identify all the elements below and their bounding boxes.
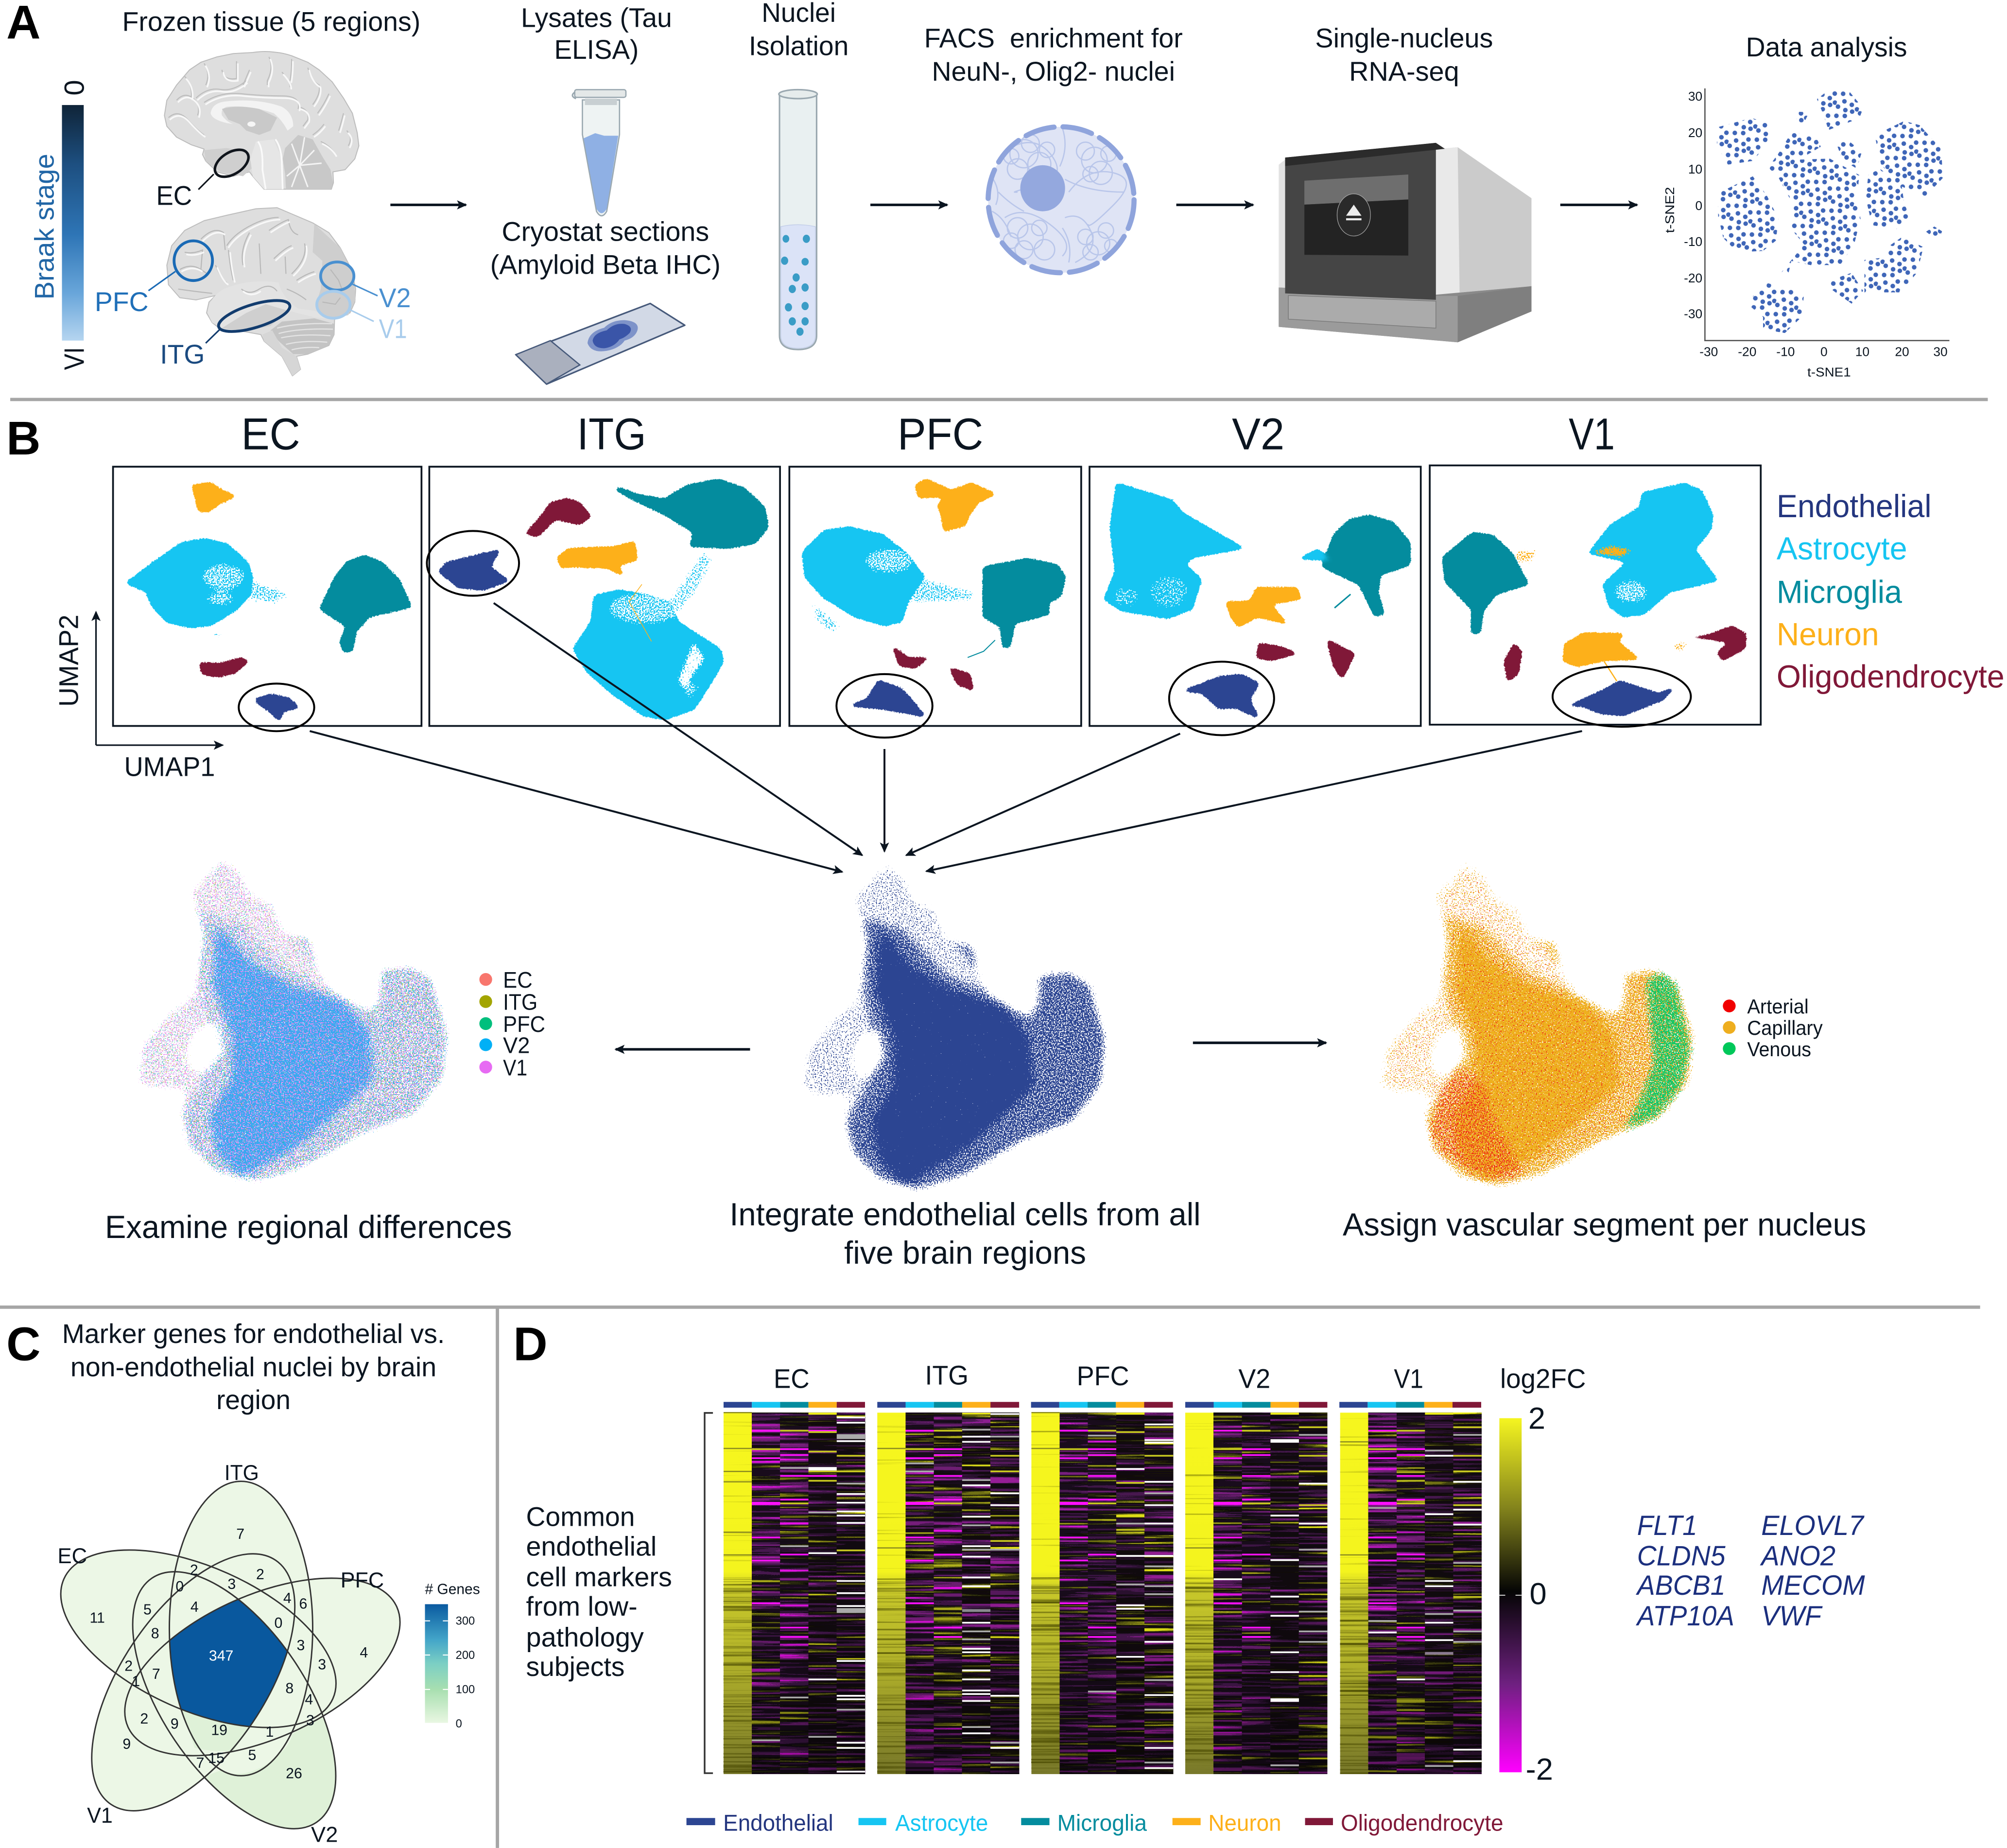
heatmap heading labels: EC	[774, 1363, 810, 1394]
Venn diagram: 5	[143, 1602, 152, 1618]
UMAP coloured by region	[134, 855, 451, 1186]
region labels: PFC	[95, 287, 149, 317]
vascular legend	[1723, 995, 1823, 1061]
chart: t-SNE scatter: 10	[1855, 344, 1869, 359]
Venn diagram: 347	[209, 1648, 233, 1664]
heading: FACS enrichment: NeuN-, Olig2- nuclei	[932, 56, 1175, 87]
caption: vascular segment: Assign vascular segment per nucleus	[1343, 1206, 1866, 1242]
side text: common markers: subjects	[526, 1652, 624, 1682]
heatmap EC	[724, 1402, 865, 1774]
chart: t-SNE scatter: 30	[1933, 344, 1948, 359]
heatmap heading labels: V1	[1394, 1363, 1423, 1394]
Venn diagram: 15	[208, 1750, 225, 1766]
arrow: EC to integrated	[310, 731, 842, 872]
heading: FACS enrichment	[924, 23, 1183, 87]
arrow: ITG to integrated	[494, 603, 862, 855]
Venn diagram: V2	[311, 1822, 338, 1847]
chart: t-SNE scatter: 10	[1688, 162, 1702, 176]
gene list	[1636, 1510, 1865, 1632]
integrated endothelial UMAP	[799, 862, 1108, 1192]
heading: cryostat sections: (Amyloid Beta IHC)	[490, 250, 721, 280]
Venn diagram: 5	[248, 1747, 256, 1763]
chart: t-SNE scatter: -30	[1684, 307, 1702, 321]
gene list: ATP10A	[1636, 1601, 1734, 1632]
panel A: workflow	[6, 0, 1949, 384]
arrow: FACS to sequencing	[1177, 205, 1253, 206]
panel letter C: C	[6, 1318, 41, 1371]
caption: integrate cells: Integrate endothelial cells from all	[729, 1196, 1201, 1232]
label EC: EC	[156, 181, 192, 211]
chart: t-SNE scatter	[1662, 88, 1949, 379]
icon: sequencer	[1279, 143, 1531, 342]
chart: t-SNE scatter: -20	[1684, 271, 1702, 285]
Venn diagram: 4	[190, 1599, 199, 1615]
Braak stage colour bar: 0	[59, 80, 90, 96]
UMAP coloured by vascular segment	[1378, 859, 1696, 1189]
Venn diagram: 4	[283, 1590, 292, 1606]
Venn diagram: 2	[140, 1711, 148, 1727]
small microglia streak PFC	[968, 640, 995, 658]
heading: frozen tissue: Frozen tissue (5 regions)	[122, 6, 420, 36]
Venn diagram	[59, 1465, 401, 1842]
cell-type legend: Neuron	[1777, 616, 1879, 652]
Venn diagram: 4	[305, 1692, 313, 1708]
heading PFC: PFC	[898, 409, 983, 459]
region legend	[479, 967, 545, 1081]
heading: FACS enrichment: FACS enrichment for	[924, 23, 1183, 53]
Braak stage colour bar: VI	[59, 347, 90, 370]
Venn diagram: 2	[124, 1658, 133, 1674]
chart: t-SNE scatter: -20	[1738, 344, 1756, 359]
Venn diagram: 7	[236, 1526, 244, 1542]
bottom cell-type legend: Neuron	[1208, 1811, 1281, 1836]
arrow: sequencing to analysis	[1560, 205, 1637, 206]
gene list: ANO2	[1760, 1540, 1835, 1571]
gene count colour bar: 200	[456, 1649, 475, 1662]
arrow: isolation to FACS	[870, 205, 947, 206]
chart: t-SNE scatter: 30	[1688, 89, 1702, 104]
heading: single-nucleus RNA-seq	[1315, 23, 1493, 87]
arrow: tissue to lysates	[390, 205, 466, 206]
Venn diagram: PFC	[341, 1568, 384, 1592]
bracket	[705, 1413, 713, 1773]
heatmap heading labels	[774, 1360, 1586, 1394]
heatmap PFC	[1031, 1402, 1173, 1774]
Venn diagram: 3	[318, 1657, 326, 1673]
arrow: PFC to integrated	[884, 749, 885, 852]
heading: nuclei isolation	[749, 0, 848, 61]
side text: common markers: Common	[526, 1502, 635, 1532]
arrow: to regional differences	[616, 1049, 750, 1050]
Venn diagram: 9	[171, 1716, 179, 1732]
region labels: V1	[379, 314, 407, 344]
bottom cell-type legend: Microglia	[1057, 1811, 1147, 1836]
chart: t-SNE scatter: t-SNE2	[1662, 187, 1677, 233]
Venn diagram: 3	[306, 1713, 314, 1729]
UMAP panel ITG	[429, 467, 780, 726]
gene count colour bar: 100	[456, 1684, 475, 1696]
circle: endothelial V1	[1553, 666, 1691, 727]
Venn diagram: V1	[87, 1803, 113, 1828]
chart: t-SNE scatter: t-SNE1	[1807, 365, 1851, 379]
heatmap heading labels: ITG	[925, 1360, 969, 1390]
log2FC colour bar: 0	[1530, 1577, 1547, 1611]
arrow: V2 to integrated	[906, 733, 1180, 855]
caption: integrate cells: five brain regions	[844, 1235, 1086, 1271]
chart: t-SNE scatter: 20	[1688, 125, 1702, 140]
panel letter B: B	[6, 412, 41, 465]
region legend: ITG	[503, 990, 537, 1015]
chart: t-SNE scatter: 0	[1695, 198, 1702, 213]
Braak stage colour bar	[30, 80, 90, 370]
region legend: EC	[503, 967, 533, 993]
Venn diagram: 19	[211, 1722, 227, 1738]
icon: lateral brain with regions	[149, 208, 378, 376]
cell-type legend: Endothelial	[1777, 488, 1932, 524]
cell-type legend: Astrocyte	[1777, 530, 1907, 566]
heatmap heading labels: V2	[1238, 1363, 1270, 1394]
heading: data analysis: Data analysis	[1746, 32, 1907, 62]
region labels	[95, 283, 411, 369]
gene list: FLT1	[1637, 1510, 1697, 1541]
chart: t-SNE scatter: -10	[1684, 234, 1702, 249]
panel letter D: D	[513, 1318, 548, 1371]
arrow: V1 to integrated	[926, 731, 1582, 871]
icon: nuclei test tube	[779, 89, 817, 349]
gene count colour bar: 0	[456, 1718, 462, 1730]
gene list: MECOM	[1761, 1570, 1865, 1601]
heading V1: V1	[1569, 409, 1615, 459]
gene list: VWF	[1761, 1601, 1823, 1632]
gene list: ELOVL7	[1761, 1510, 1865, 1541]
heatmap heading labels: log2FC	[1500, 1363, 1586, 1394]
icon: microscope slide	[516, 303, 685, 384]
caption: regional differences: Examine regional differences	[105, 1209, 512, 1245]
heatmap heading labels: PFC	[1077, 1361, 1129, 1391]
UMAP axes	[54, 612, 223, 782]
heatmap ITG	[877, 1402, 1019, 1774]
side text: common markers: endothelial	[526, 1531, 657, 1561]
Venn diagram: 11	[89, 1610, 105, 1626]
icon: nucleus	[988, 127, 1134, 273]
caption: integrate cells	[729, 1196, 1201, 1271]
bottom cell-type legend: Endothelial	[723, 1811, 833, 1836]
icon: sagittal brain	[164, 52, 359, 190]
region labels: V2	[379, 283, 411, 313]
region labels: ITG	[160, 339, 205, 369]
circle: endothelial V2	[1169, 662, 1274, 735]
Venn diagram: 0	[175, 1579, 184, 1595]
small microglia streak V2	[1334, 594, 1350, 608]
arrow: to vascular segment	[1193, 1042, 1326, 1043]
Venn diagram: 0	[274, 1615, 282, 1631]
Venn diagram: 3	[227, 1576, 236, 1592]
chart: t-SNE scatter: -10	[1776, 344, 1795, 359]
log2FC colour bar: -2	[1526, 1752, 1553, 1786]
side text: common markers: from low-	[526, 1591, 638, 1621]
UMAP panel EC	[113, 467, 421, 726]
heading: cryostat sections: Cryostat sections	[502, 216, 709, 246]
side text: common markers	[526, 1502, 672, 1682]
heading: single-nucleus RNA-seq: RNA-seq	[1349, 56, 1459, 87]
UMAP panel PFC	[789, 467, 1081, 726]
log2FC colour bar: 2	[1528, 1402, 1545, 1436]
UMAP axes: UMAP2	[54, 614, 84, 707]
vascular legend: Venous	[1747, 1038, 1811, 1061]
Venn diagram: 4	[360, 1645, 368, 1661]
panel C title	[62, 1319, 445, 1415]
gene count colour bar	[425, 1581, 480, 1730]
panel C title: Marker genes for endothelial vs.	[62, 1319, 445, 1349]
side text: common markers: pathology	[526, 1622, 644, 1652]
chart: t-SNE scatter: 20	[1895, 344, 1909, 359]
cell-type legend: Microglia	[1777, 574, 1902, 610]
circle: endothelial ITG	[427, 531, 519, 596]
Venn diagram: 6	[299, 1596, 307, 1612]
Venn diagram: 8	[285, 1680, 294, 1696]
log2FC colour bar	[1499, 1402, 1553, 1786]
heading: nuclei isolation: Isolation	[749, 31, 848, 61]
icon: lysate tube	[572, 89, 626, 216]
Venn diagram: 9	[122, 1736, 131, 1752]
gene count colour bar: # Genes	[425, 1581, 480, 1597]
cell-type legend	[1777, 488, 2005, 695]
Venn diagram: 2	[190, 1562, 198, 1578]
chart: t-SNE scatter: 0	[1820, 344, 1828, 359]
Venn diagram: 1	[266, 1724, 274, 1740]
Braak stage colour bar: Braak stage	[30, 154, 60, 299]
gene count colour bar: 300	[456, 1615, 475, 1628]
vascular legend: Arterial	[1747, 995, 1809, 1018]
circle: endothelial PFC	[836, 674, 933, 737]
bottom cell-type legend: Astrocyte	[895, 1811, 988, 1836]
panel B: UMAP integration	[6, 409, 2005, 1271]
heading: lysates: ELISA)	[554, 35, 639, 65]
neuron streak V1	[1604, 661, 1617, 681]
gene list: CLDN5	[1637, 1540, 1726, 1571]
Venn diagram: 1	[132, 1674, 140, 1690]
heading: lysates: Lysates (Tau	[521, 2, 672, 33]
Venn diagram: 26	[286, 1766, 302, 1782]
bottom cell-type legend	[687, 1811, 1504, 1836]
bottom cell-type legend: Oligodendrocyte	[1341, 1811, 1504, 1836]
region legend: V2	[503, 1033, 530, 1058]
heading V2: V2	[1232, 409, 1284, 459]
neuron streak ITG	[629, 584, 652, 642]
UMAP panel V2	[1090, 467, 1421, 726]
panel C: Venn diagram	[6, 1318, 480, 1848]
heading: single-nucleus RNA-seq: Single-nucleus	[1315, 23, 1493, 53]
circle: endothelial EC	[239, 683, 314, 731]
region legend: PFC	[503, 1011, 545, 1037]
panel C title: non-endothelial nuclei by brain	[70, 1352, 436, 1382]
Venn diagram: 2	[256, 1567, 264, 1583]
heatmap V2	[1185, 1402, 1327, 1774]
UMAP panel V1	[1430, 466, 1761, 725]
panel C title: region	[216, 1385, 291, 1415]
heading ITG: ITG	[577, 409, 646, 459]
cell-type legend: Oligodendrocyte	[1777, 659, 2005, 695]
heatmap V1	[1339, 1402, 1482, 1774]
chart: t-SNE scatter: -30	[1699, 344, 1718, 359]
vascular legend: Capillary	[1747, 1016, 1823, 1039]
side text: common markers: cell markers	[526, 1562, 672, 1592]
Venn diagram: 7	[152, 1666, 160, 1682]
Venn diagram: 7	[196, 1755, 204, 1771]
Venn diagram: 8	[151, 1625, 159, 1641]
gene list: ABCB1	[1636, 1570, 1726, 1601]
Venn diagram: ITG	[225, 1461, 259, 1485]
heading: cryostat sections	[490, 216, 721, 280]
Venn diagram: EC	[58, 1544, 87, 1568]
UMAP axes: UMAP1	[124, 751, 215, 782]
heading EC: EC	[241, 409, 300, 459]
Venn diagram: 3	[297, 1638, 305, 1654]
heading: lysates	[521, 2, 672, 65]
panel D: heatmap	[513, 1318, 1865, 1836]
region legend: V1	[503, 1055, 527, 1081]
